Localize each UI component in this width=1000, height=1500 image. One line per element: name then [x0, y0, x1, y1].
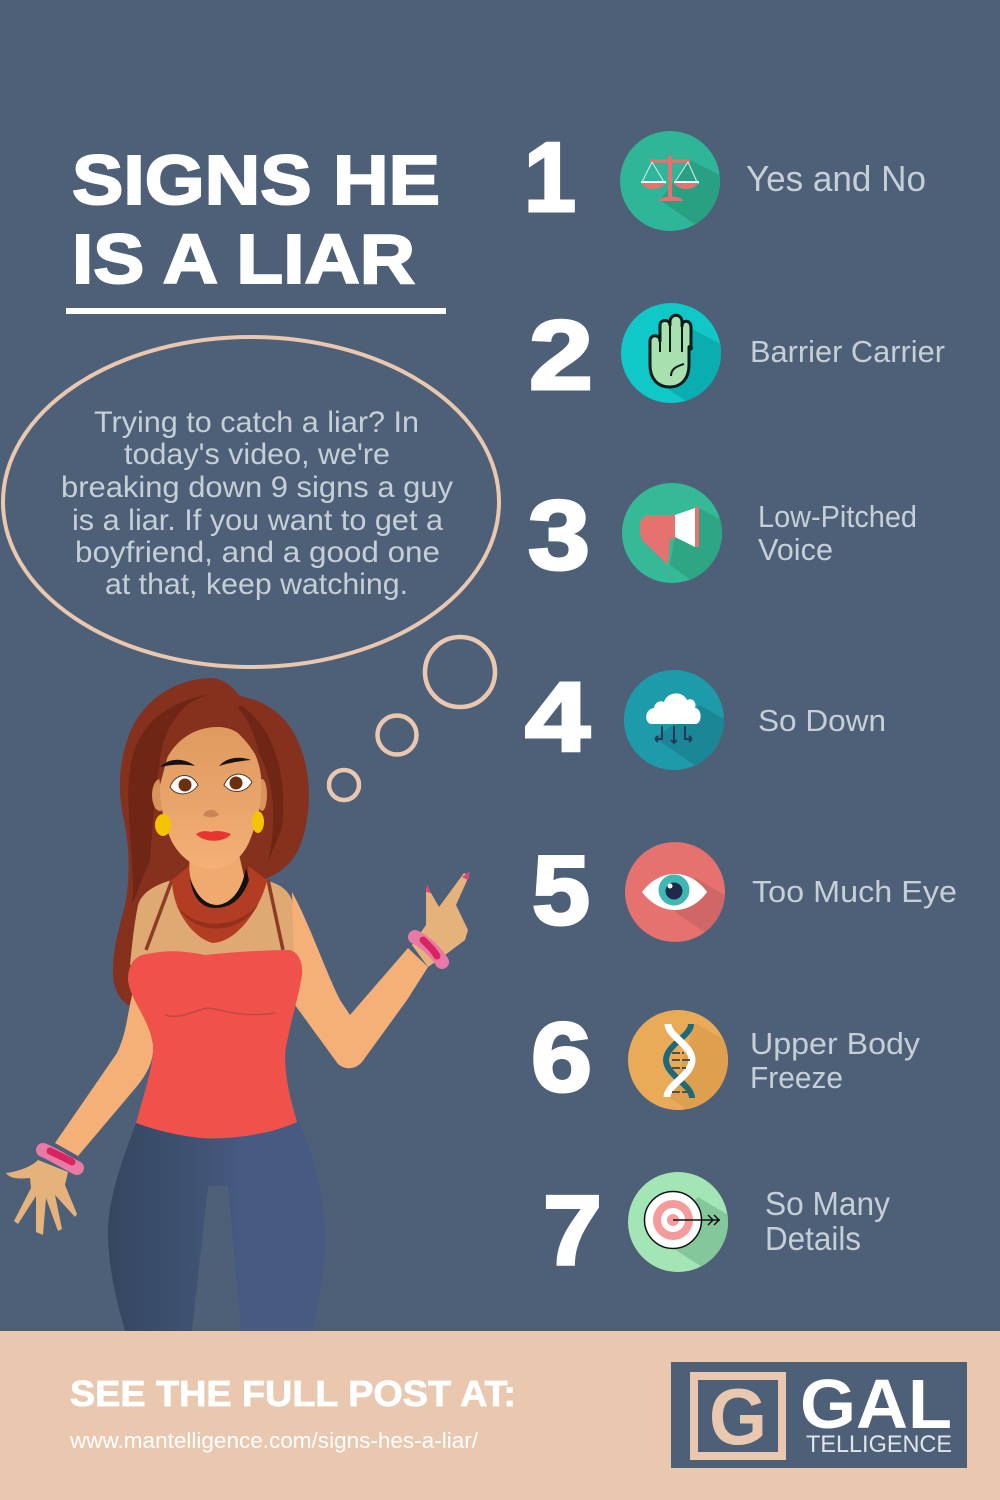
item 4: [524, 670, 884, 770]
face: [160, 727, 262, 869]
neck: [188, 850, 246, 915]
item 6: [533, 1010, 920, 1110]
footer call to action: SEE THE FULL POST AT:: [70, 1373, 516, 1414]
item 3: [528, 483, 916, 583]
speech bubble with intro text: at that, keep watching.: [105, 568, 408, 601]
item 5: 5: [532, 835, 590, 945]
lips: [196, 831, 231, 841]
item 5: Too Much Eye: [752, 874, 957, 909]
item 7: 7: [543, 1175, 602, 1285]
right arm upper and forearm: [292, 892, 428, 1068]
torso skin: [130, 880, 302, 965]
item 5: [533, 842, 956, 942]
hair fringe: [159, 695, 262, 785]
left scrunchie: [43, 1150, 77, 1168]
speech bubble with intro text: is a liar. If you want to get a: [72, 504, 443, 537]
icon: megaphone: [622, 483, 722, 583]
item 7: [546, 1172, 890, 1272]
left arm: [55, 985, 153, 1156]
speech bubble with intro text: boyfriend, and a good one: [75, 536, 440, 569]
title: IS A LIAR: [72, 220, 415, 298]
item 2: 2: [529, 300, 593, 410]
item 1: Yes and No: [746, 158, 926, 199]
jeans: [108, 1120, 325, 1331]
hair: [113, 678, 309, 1005]
footer call to action: [69, 1373, 516, 1453]
illustration: woman: [6, 678, 470, 1331]
scarf: [172, 866, 267, 943]
icon: scales: [620, 131, 720, 231]
nose: [203, 810, 219, 817]
item 7: Details: [765, 1220, 861, 1257]
item 4: 4: [525, 662, 590, 772]
item 3: Voice: [758, 532, 833, 567]
speech bubble with intro text: breaking down 9 signs a guy: [61, 471, 453, 504]
item 1: 1: [524, 122, 576, 232]
footer call to action: www.mantelligence.com/signs-hes-a-liar/: [69, 1428, 479, 1453]
right scrunchie: [415, 937, 442, 962]
logo: TELLIGENCE: [806, 1431, 952, 1458]
top: [128, 950, 302, 1138]
footer band: [0, 1331, 1000, 1500]
item 2: Barrier Carrier: [750, 334, 945, 369]
item 4: So Down: [758, 703, 886, 738]
icon: target: [628, 1172, 728, 1272]
speech bubble with intro text: Trying to catch a liar? In: [94, 406, 419, 439]
earrings: [155, 811, 264, 836]
ears: [152, 779, 168, 811]
icon: raised hand: [621, 303, 721, 403]
icon: cloud: [624, 670, 724, 770]
icon: eye: [625, 842, 725, 942]
halter straps: [146, 880, 283, 950]
speech bubble with intro text: today's video, we're: [124, 438, 390, 471]
eyes and brows: [160, 758, 252, 794]
thought bubbles: [329, 637, 495, 800]
left hand: [6, 1160, 77, 1235]
item 7: So Many: [765, 1185, 890, 1222]
title: [66, 141, 446, 314]
speech bubble with intro text: [3, 337, 499, 667]
item 6: 6: [531, 1002, 592, 1112]
item 2: [531, 303, 944, 403]
item 1: [528, 131, 924, 231]
item 3: 3: [528, 480, 590, 590]
logo: [671, 1362, 967, 1468]
top crease: [165, 1008, 275, 1016]
logo: G: [709, 1372, 767, 1461]
item 6: Upper Body: [750, 1026, 921, 1061]
right hand pointing: [412, 873, 469, 967]
logo: GAL: [800, 1365, 952, 1443]
title: SIGNS HE: [72, 141, 440, 219]
item 6: Freeze: [750, 1060, 843, 1095]
item 3: Low-Pitched: [758, 499, 917, 534]
icon: DNA: [628, 1010, 728, 1110]
